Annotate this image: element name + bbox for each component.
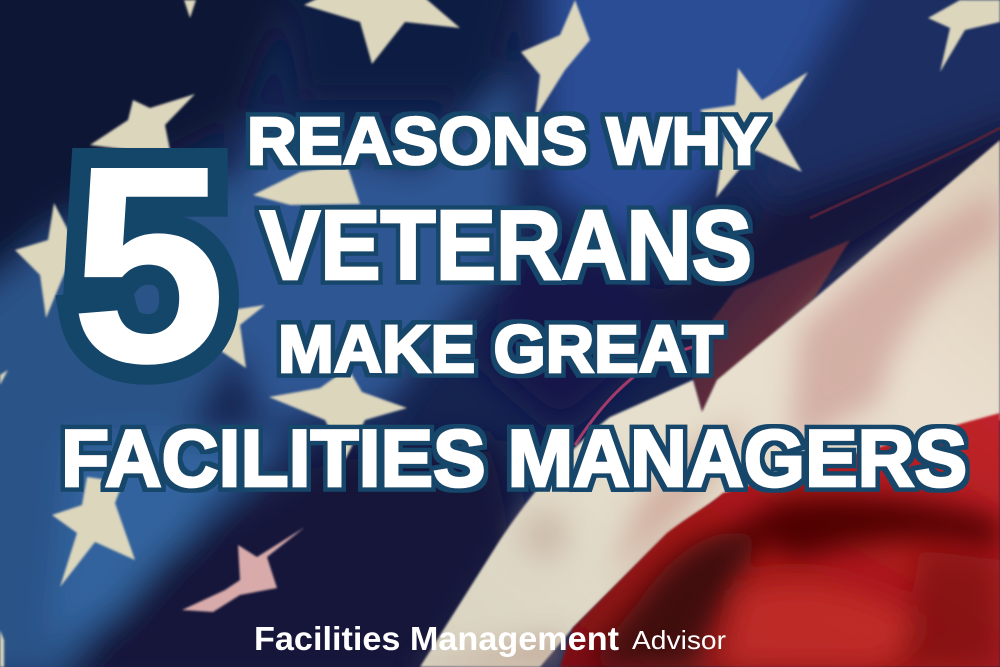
pink shading bbox=[410, 190, 1000, 667]
title line: facilities managers: FACILITIES MANAGERS bbox=[61, 414, 967, 504]
title bbox=[61, 104, 967, 504]
footer logo: Facilities Management bbox=[254, 620, 619, 657]
title line: reasons why: REASONS WHY bbox=[247, 104, 767, 179]
title line: make great: MAKE GREAT bbox=[278, 312, 723, 387]
numeral 5: 5 bbox=[70, 107, 227, 422]
red shading bbox=[585, 497, 1000, 667]
title line: veterans: VETERANS bbox=[260, 190, 752, 300]
red stripe seam bbox=[575, 345, 700, 445]
white stripes bbox=[420, 140, 1000, 667]
maroon wedge bbox=[693, 240, 850, 415]
footer logo: Advisor bbox=[632, 625, 726, 655]
red field bbox=[560, 413, 1000, 667]
